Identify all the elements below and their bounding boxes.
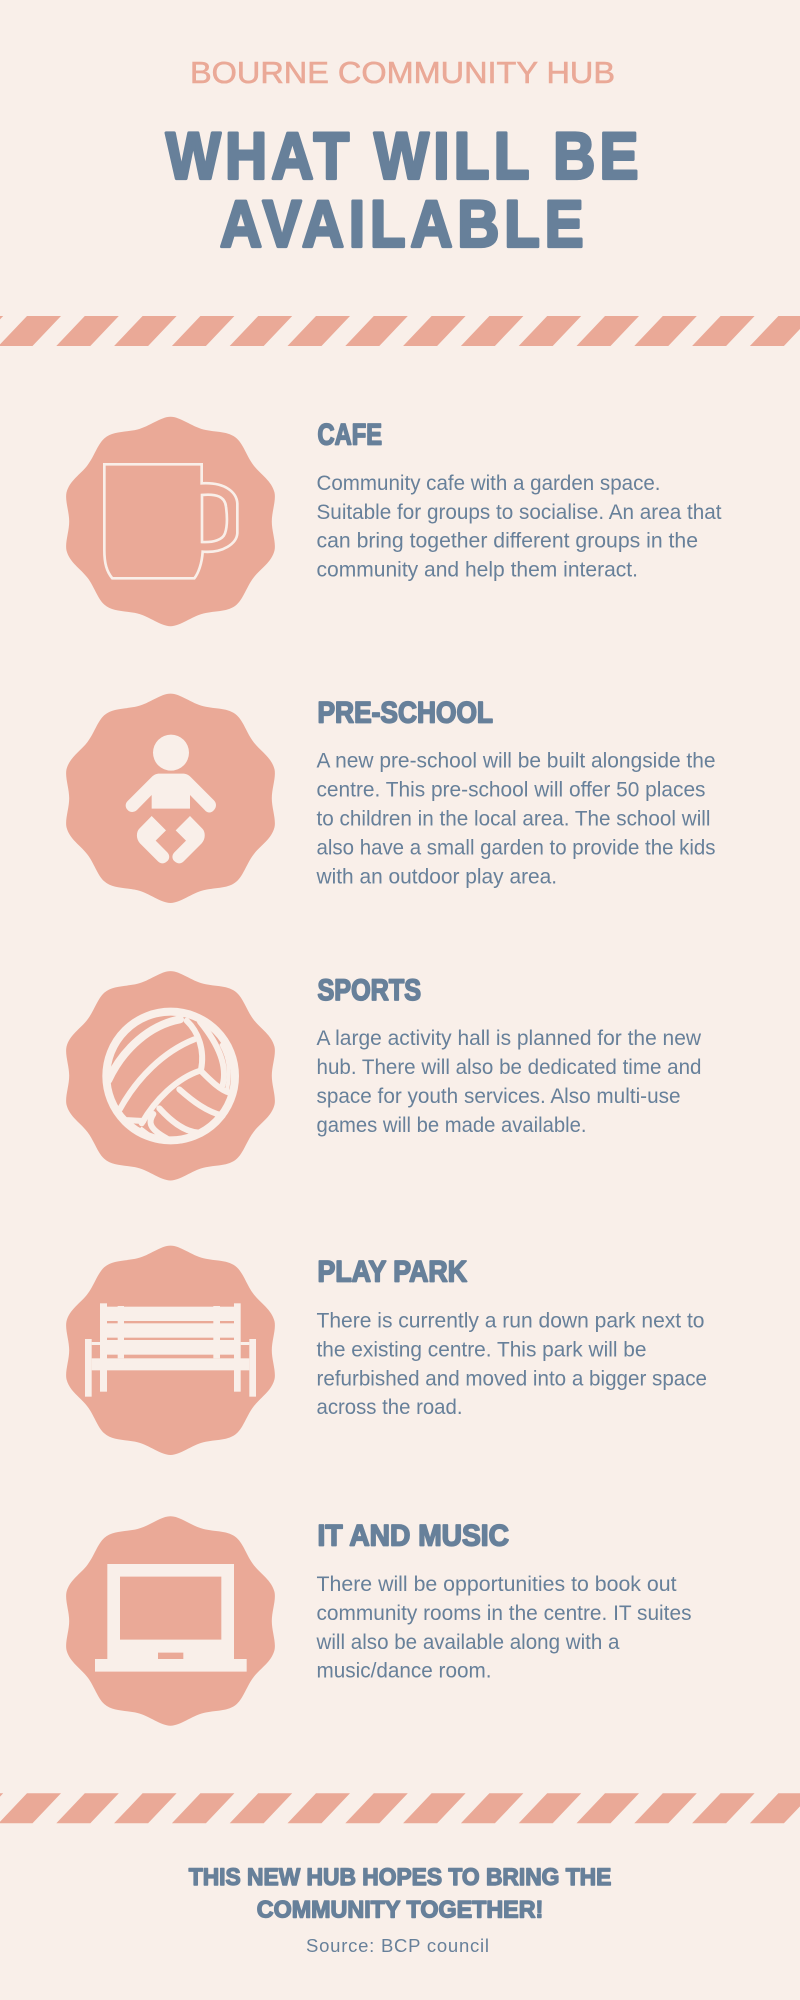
- text: pre-school description: also have a small garden to provide the kids: [316, 837, 716, 860]
- text: sports description: A large activity hall is planned for the new: [316, 1027, 702, 1050]
- closing statement: [189, 1864, 611, 1924]
- heading: sports: SPORTS: [318, 974, 421, 1007]
- text: play park description: the existing centre. This park will be: [316, 1338, 646, 1361]
- heading: play park: PLAY PARK: [318, 1256, 467, 1289]
- text: cafe description: [316, 472, 722, 582]
- text: IT and music description: community rooms in the centre. IT suites: [316, 1602, 692, 1625]
- source line: Source: BCP council: [306, 1935, 489, 1956]
- text: pre-school description: to children in the local area. The school will: [316, 808, 710, 831]
- title: What Will Be Available: [166, 120, 638, 261]
- badge: IT and music: [66, 1516, 275, 1726]
- title: What Will Be Available: WHAT WILL BE: [166, 120, 638, 193]
- heading: cafe: CAFE: [318, 418, 382, 451]
- closing statement: COMMUNITY TOGETHER!: [257, 1897, 543, 1924]
- text: pre-school description: with an outdoor play area.: [316, 866, 557, 889]
- text: play park description: across the road.: [316, 1396, 462, 1419]
- text: pre-school description: [316, 750, 716, 889]
- panel: cafe: [66, 417, 722, 626]
- title: What Will Be Available: AVAILABLE: [220, 188, 583, 261]
- text: cafe description: community and help them interact.: [316, 559, 638, 582]
- panel: IT and music: [66, 1516, 691, 1726]
- panel: pre-school: [66, 694, 715, 903]
- text: pre-school description: centre. This pre-school will offer 50 places: [316, 779, 706, 802]
- badge: cafe: [66, 417, 275, 626]
- text: sports description: hub. There will also be dedicated time and: [316, 1056, 702, 1079]
- text: cafe description: Community cafe with a garden space.: [316, 472, 660, 495]
- text: cafe description: Suitable for groups to socialise. An area that: [316, 501, 722, 524]
- panel: sports: [66, 971, 702, 1180]
- text: pre-school description: A new pre-school will be built alongside the: [316, 750, 716, 773]
- icon: laptop: [95, 1564, 247, 1672]
- text: play park description: refurbished and moved into a bigger space: [316, 1367, 707, 1390]
- badge: pre-school: [66, 694, 275, 903]
- icon: volleyball: [106, 1012, 235, 1140]
- top striped divider: [0, 316, 800, 346]
- icon: mug: [104, 464, 237, 578]
- text: sports description: space for youth services. Also multi-use: [316, 1085, 680, 1108]
- heading: IT and music: IT AND MUSIC: [318, 1519, 509, 1552]
- text: IT and music description: There will be opportunities to book out: [316, 1573, 677, 1596]
- text: cafe description: can bring together different groups in the: [316, 530, 698, 553]
- closing statement: THIS NEW HUB HOPES TO BRING THE: [189, 1864, 611, 1891]
- badge: play park: [66, 1246, 275, 1455]
- subtitle: Bourne Community Hub: BOURNE COMMUNITY HUB: [190, 55, 615, 90]
- icon: bench: [85, 1303, 256, 1397]
- text: play park description: There is currently a run down park next to: [316, 1309, 704, 1332]
- text: sports description: games will be made available.: [316, 1114, 586, 1137]
- panel: play park: [66, 1246, 707, 1455]
- heading: pre-school: PRE-SCHOOL: [318, 696, 493, 730]
- text: IT and music description: music/dance room.: [316, 1660, 492, 1683]
- text: sports description: [316, 1027, 702, 1137]
- icon: baby: [126, 735, 216, 863]
- text: play park description: [316, 1309, 707, 1419]
- text: IT and music description: will also be available along with a: [316, 1631, 620, 1654]
- badge: sports: [66, 971, 275, 1180]
- bottom striped divider: [0, 1793, 800, 1823]
- text: IT and music description: [316, 1573, 692, 1683]
